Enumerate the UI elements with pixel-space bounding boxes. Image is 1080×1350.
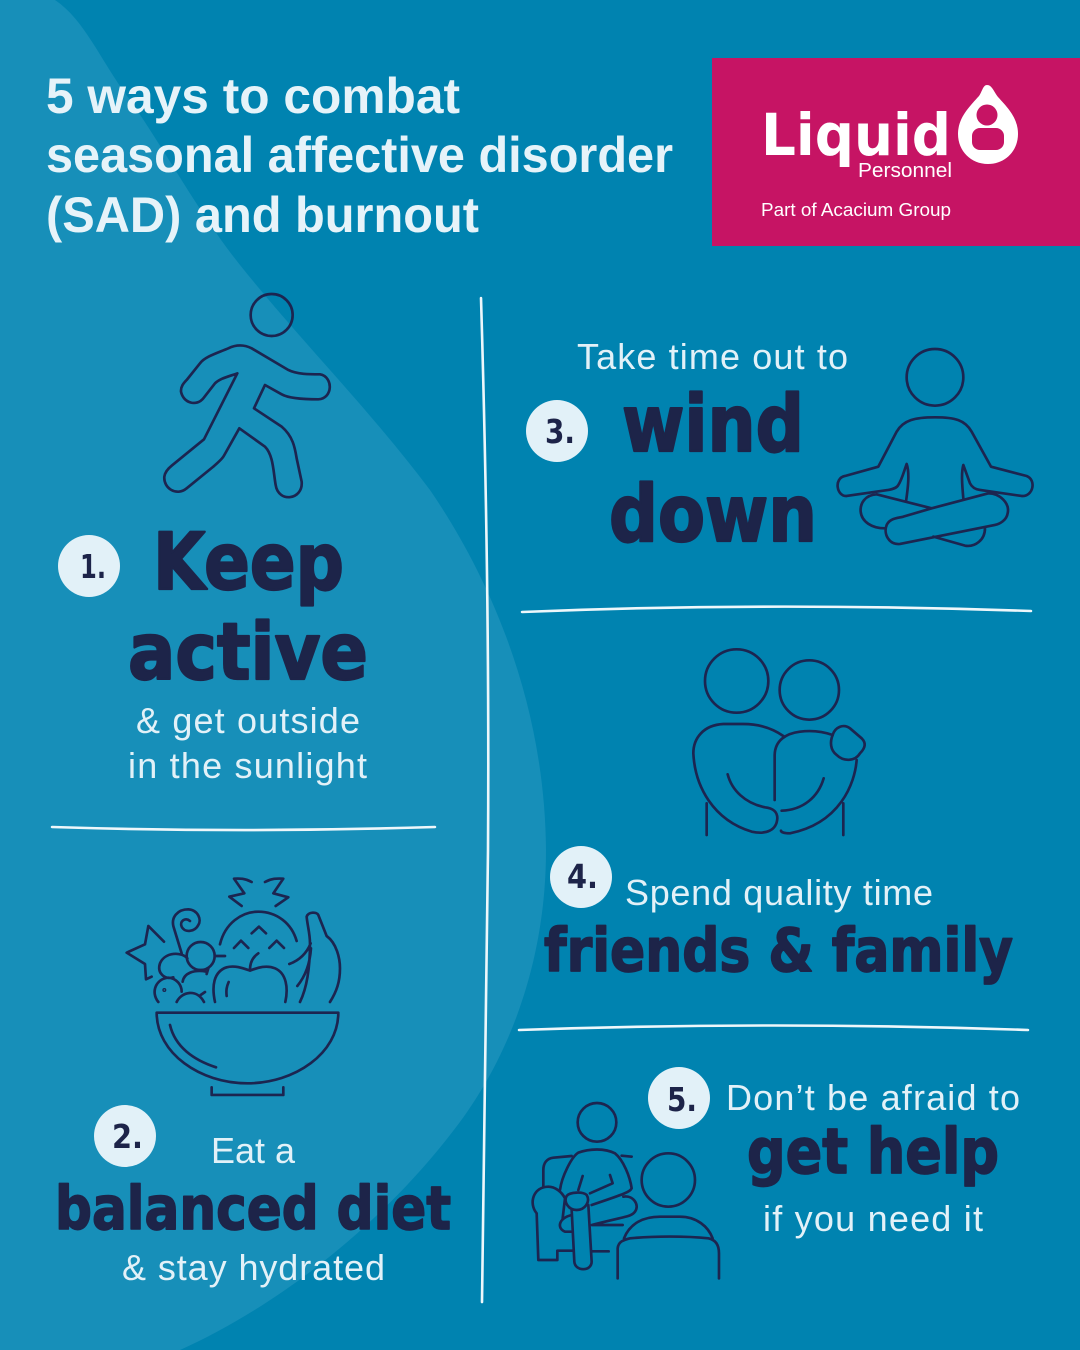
heading: balanced diet: balanced diet: [55, 1174, 451, 1244]
number badge 5: 5.: [667, 1080, 697, 1119]
number badge 5: [648, 1067, 710, 1129]
logo wordmark: Liquid: [761, 101, 951, 169]
icon: walking person: [164, 294, 330, 497]
text: stay hydrated: & stay hydrated: [122, 1247, 385, 1288]
text: get outside: in the sunlight: [128, 745, 367, 786]
logo sub-brand: Personnel: [858, 160, 952, 182]
heading: wind down: wind: [622, 380, 804, 470]
heading: wind down: down: [609, 470, 817, 560]
icon: two people hugging: [693, 649, 865, 835]
heading: keep active: Keep: [153, 518, 344, 608]
title: (SAD) and burnout: [46, 187, 479, 243]
panel: wind down: [526, 336, 1033, 560]
icon: logo drop with person: [958, 85, 1018, 164]
text: spend quality time: Spend quality time: [625, 872, 933, 913]
panel: keep active: [58, 294, 368, 786]
number badge 3: [526, 400, 588, 462]
title: [46, 68, 673, 243]
panel: friends and family: [544, 649, 1013, 986]
icon: therapy session: [533, 1103, 719, 1278]
number badge 2: 2.: [112, 1117, 143, 1156]
panel: get help: [533, 1067, 1020, 1278]
text: if you need it: if you need it: [763, 1198, 983, 1239]
number badge 1: [58, 535, 120, 597]
heading: keep active: active: [128, 608, 368, 698]
number badge 4: [550, 846, 612, 908]
heading: keep active: [128, 518, 368, 698]
heading: wind down: [609, 380, 817, 560]
heading: get help: get help: [747, 1115, 999, 1188]
text: eat a: Eat a: [211, 1130, 296, 1171]
title: 5 ways to combat: [46, 68, 460, 124]
number badge 4: 4.: [567, 857, 598, 896]
panel: balanced diet: [55, 879, 451, 1288]
number badge 1: 1.: [80, 547, 106, 586]
heading: friends and family: friends & family: [544, 916, 1013, 986]
title: seasonal affective disorder: [46, 127, 673, 183]
text: take time out to: Take time out to: [577, 336, 848, 377]
icon: fruit bowl: [127, 879, 340, 1095]
number badge 3: 3.: [545, 412, 575, 451]
text: get outside: [128, 700, 367, 786]
text: don't be afraid to: Don’t be afraid to: [726, 1077, 1020, 1118]
icon: meditating person: [838, 349, 1033, 546]
text: get outside: & get outside: [136, 700, 360, 741]
logo tagline: Part of Acacium Group: [761, 200, 951, 220]
number badge 2: [94, 1105, 156, 1167]
logo panel: [712, 58, 1080, 246]
